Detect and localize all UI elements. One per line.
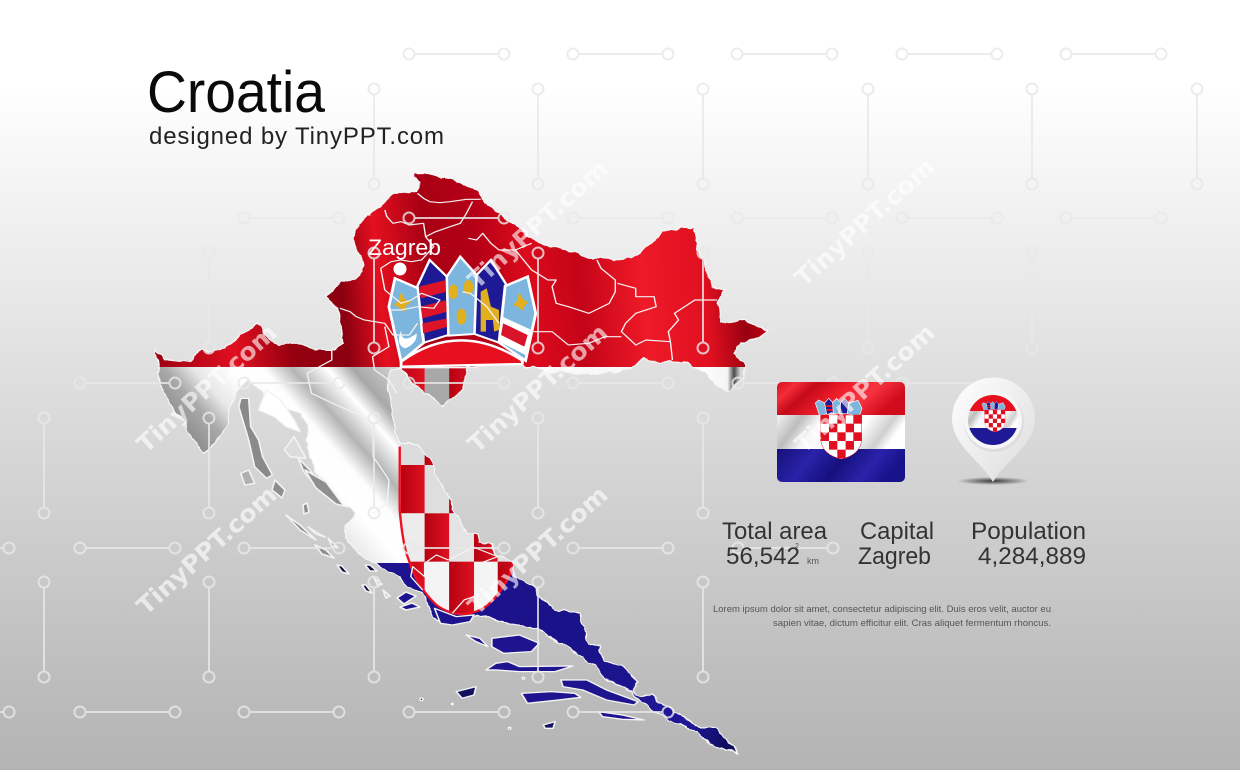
capital marker: Zagreb: Zagreb [368,235,441,260]
islands [239,390,644,729]
icon: location pin with flag [952,377,1035,485]
subtitle: designed by TinyPPT.com [149,123,444,150]
stat: total area: Total area [722,518,828,545]
watermarks: TinyPPT.com [131,319,282,458]
map flag fill [140,160,780,763]
map of Croatia with flag fill [140,160,780,763]
region borders south [373,423,498,613]
stat: total area [722,518,828,570]
icon: waving flag of Croatia [777,382,905,482]
checkerboard shield [398,366,514,616]
watermarks: TinyPPT.com [789,153,940,292]
stat: capital: Zagreb [858,543,931,570]
watermarks: TinyPPT.com [131,481,282,620]
title: Croatia [147,60,326,125]
watermarks: TinyPPT.com [462,155,613,294]
description text [713,604,1051,629]
small Dalmatian islands [272,458,420,610]
region borders [307,193,717,437]
description text: sapien vitae, dictum efficitur elit. Cras aliquet fermentum rhoncus. [773,618,1051,629]
watermarks [131,153,940,620]
stat: total area: 56,542 [726,543,800,570]
stat: total area: 2 [795,543,799,550]
stat: capital: Capital [860,518,934,545]
description text: Lorem ipsum dolor sit amet, consectetur adipiscing elit. Duis eros velit, auctor eu [713,604,1051,615]
gold charges [394,280,528,332]
stat: population: Population [971,518,1086,545]
stat: total area: km [807,556,819,567]
map outline [156,173,767,753]
watermarks: TinyPPT.com [789,319,940,458]
stat: population [971,518,1086,570]
watermarks: TinyPPT.com [462,319,613,458]
crown of the coat of arms [389,257,536,367]
stat: population: 4,284,889 [978,543,1086,570]
watermarks: TinyPPT.com [462,481,613,620]
stat: capital [858,518,934,570]
capital marker: Zagreb [368,235,441,276]
